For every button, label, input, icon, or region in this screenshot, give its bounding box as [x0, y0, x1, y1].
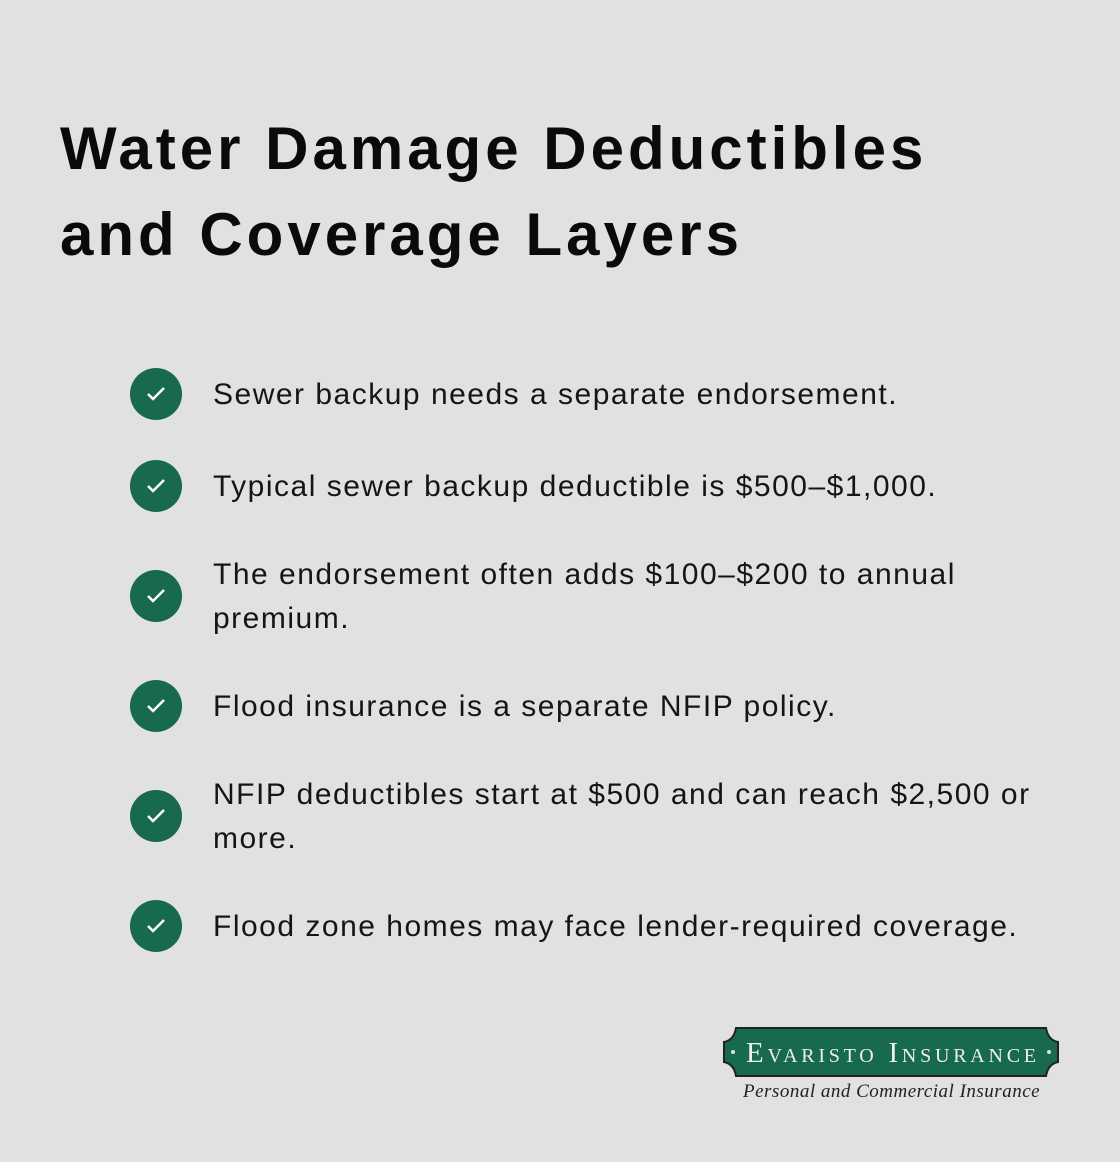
- title: and Coverage Layers: [60, 201, 743, 268]
- logo: Evaristo Insurance: [746, 1037, 1036, 1069]
- item 6: [130, 900, 1018, 952]
- title: Water Damage Deductibles: [60, 115, 927, 182]
- title: [60, 115, 927, 268]
- item 1: [130, 368, 898, 420]
- item 4: Flood insurance is a separate NFIP policy.: [213, 690, 837, 723]
- item 3: The endorsement often adds $100–$200 to annual premium.: [213, 558, 956, 635]
- item 6: Flood zone homes may face lender-required coverage.: [213, 910, 1018, 943]
- item 2: Typical sewer backup deductible is $500–$1,000.: [213, 470, 937, 503]
- item 1: Sewer backup needs a separate endorsement.: [213, 378, 898, 411]
- logo: Personal and Commercial Insurance: [743, 1081, 1040, 1102]
- logo: [723, 1027, 1059, 1102]
- item 5: NFIP deductibles start at $500 and can reach $2,500 or more.: [213, 778, 1031, 855]
- item 2: [130, 460, 937, 512]
- item 4: [130, 680, 837, 732]
